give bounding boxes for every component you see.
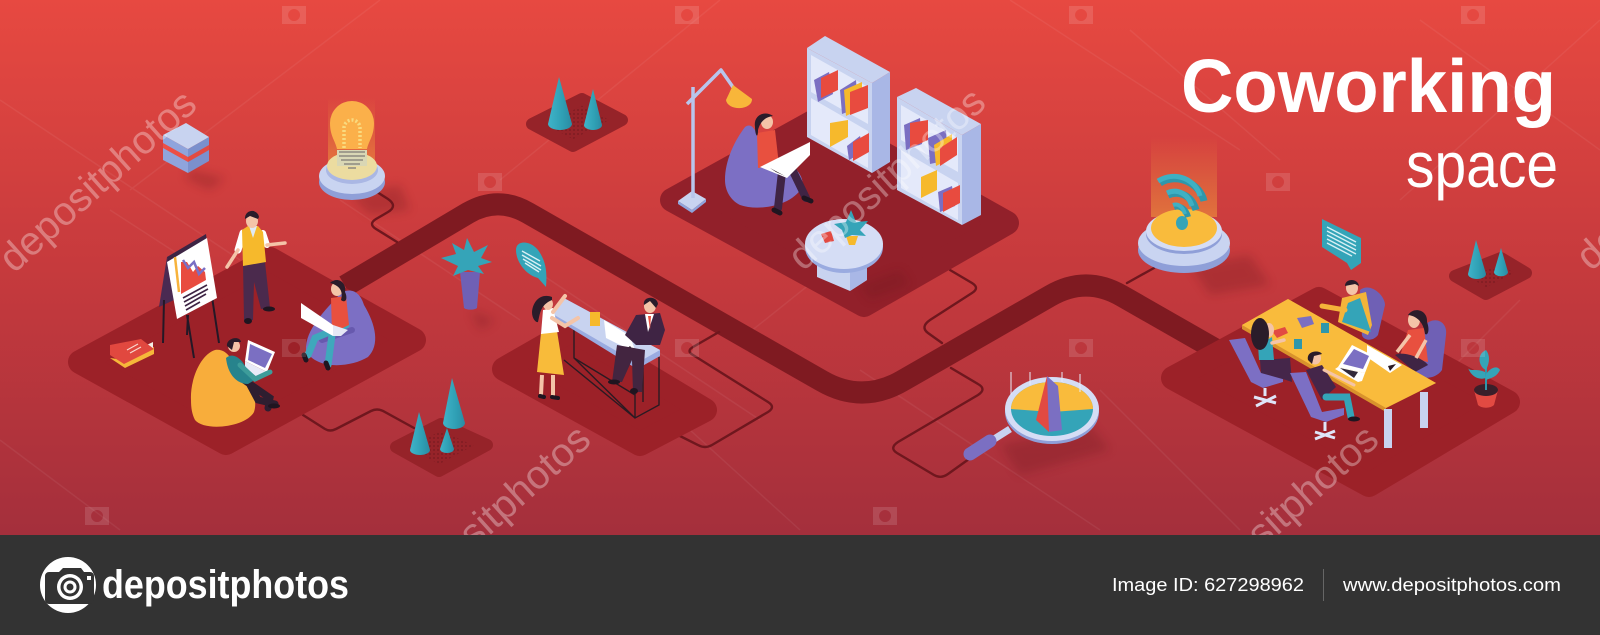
cones on left mat: [410, 378, 465, 455]
panel: meeting floor: [1173, 299, 1508, 485]
icon: wifi on pedestal: [1138, 137, 1230, 273]
watermarks: depositphotos: [385, 416, 599, 616]
watermarks: depositphotos: [780, 79, 994, 279]
icon: light bulb on pedestal: [319, 97, 385, 200]
speech bubble right: [1322, 219, 1361, 270]
person: man at top of table: [1322, 280, 1385, 340]
panel: presentation zone floor: [80, 259, 414, 443]
person: woman left of table: [1229, 318, 1292, 406]
footer bar: [0, 535, 1600, 635]
round table with plant: [805, 210, 883, 291]
person: man on yellow beanbag: [191, 338, 280, 427]
meeting table with team: [1229, 280, 1446, 448]
icon: potted plant red: [1468, 350, 1500, 408]
panel: library floor: [672, 118, 1007, 305]
cones on top mat: [548, 77, 602, 130]
person: woman on beanbag with laptop: [725, 113, 811, 213]
person: man in suit: [608, 298, 665, 394]
person: man at front of table: [1290, 352, 1360, 439]
person: woman in yellow skirt: [532, 296, 578, 398]
panel: dotted mat left: [396, 424, 487, 471]
icon: stack of books: [110, 339, 154, 368]
cones on right mat: [1468, 240, 1508, 279]
website: www.depositphotos.com: [1342, 575, 1561, 595]
logo wordmark: depositphotos: [102, 563, 349, 607]
person: presenter in yellow vest: [227, 211, 285, 324]
panel: dotted mat top: [532, 99, 622, 146]
panel: standing desk floor: [504, 330, 705, 444]
bookshelf 1: [807, 36, 890, 173]
icon: stacked cube: [163, 123, 209, 173]
circuit connector lines: [303, 192, 1154, 477]
icon: floor lamp: [678, 70, 752, 213]
logo icon: [40, 557, 96, 613]
chart on easel: [159, 234, 219, 358]
watermarks: depositphotos: [1173, 416, 1387, 616]
person: woman right of table: [1395, 310, 1446, 378]
watermark camera icons: [85, 6, 1485, 525]
bookshelf 2: [897, 88, 981, 225]
title: [1181, 44, 1558, 201]
laptops on table: [1335, 345, 1402, 382]
soft shadows: [185, 170, 1270, 475]
speech bubble left: [516, 242, 546, 287]
image id: Image ID: 627298962: [1112, 575, 1304, 595]
standing desk with woman and man: [532, 296, 665, 418]
main route band: [345, 204, 1220, 392]
person: woman on purple beanbag: [301, 280, 375, 368]
panel: dotted mat right: [1455, 258, 1526, 294]
title: Coworking: [1181, 44, 1556, 128]
subtitle: space: [1406, 129, 1558, 201]
icon: magnifier with pie chart: [970, 372, 1099, 454]
icon: potted plant in purple vase: [441, 238, 492, 310]
